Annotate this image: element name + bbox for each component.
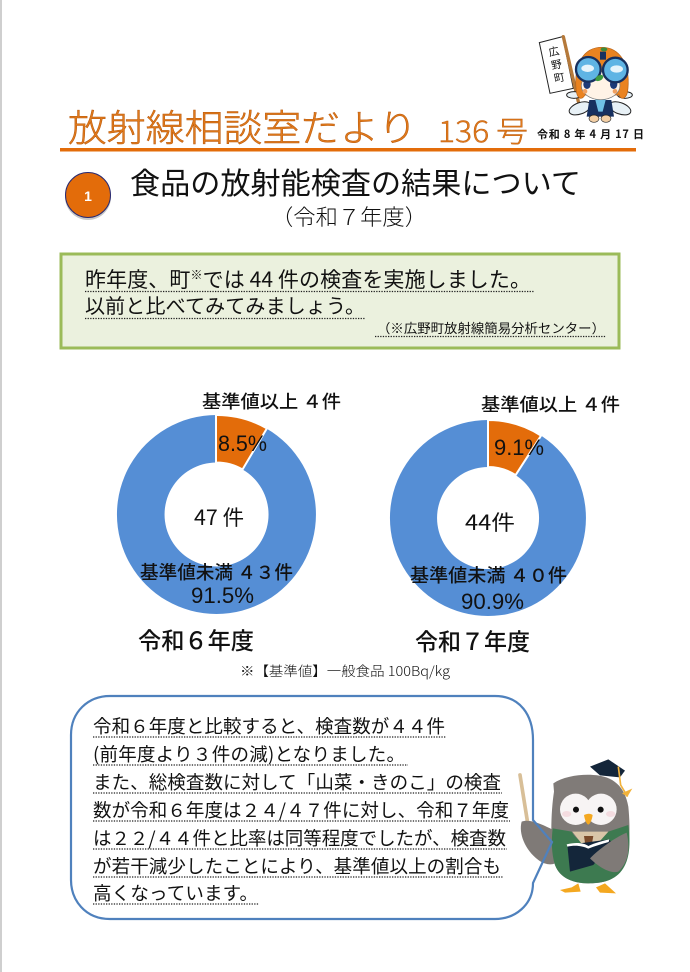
icon: section number badge: 1 — [84, 188, 92, 204]
intro text line 1: では 44 件の検査を実施しました。 — [203, 264, 531, 294]
footnote: standard value: ※【基準値】一般食品 100Bq/kg — [240, 660, 451, 680]
issue number: 136 号 — [438, 109, 528, 151]
value: 91.5%: 91.5% — [191, 583, 254, 608]
callout: explanation speech bubble — [71, 696, 552, 919]
value: 8.5%: 8.5% — [218, 431, 267, 456]
value: 90.9%: 90.9% — [461, 589, 524, 614]
source note: （※広野町放射線簡易分析センター） — [377, 318, 605, 337]
intro text line 1: 昨年度、町 — [85, 264, 190, 294]
callout text: 高くなっています。 — [93, 880, 258, 906]
callout text — [93, 713, 509, 906]
panel: introduction — [61, 254, 619, 348]
label: below standard: 基準値未満 ４０件 — [410, 562, 567, 588]
label: at or above standard: 基準値以上 ４件 — [481, 391, 620, 417]
donut chart: fiscal Reiwa 7 — [390, 391, 620, 657]
callout text: 令和６年度と比較すると、検査数が４４件 — [93, 713, 445, 739]
heading subtitle: （令和７年度） — [271, 200, 427, 232]
issue date: 令和 8 年 4 月 17 日 — [537, 126, 644, 142]
callout text: また、総検査数に対して「山菜・きのこ」の検査 — [93, 769, 501, 795]
label: below standard: 基準値未満 ４３件 — [140, 559, 293, 585]
donut chart: fiscal Reiwa 6 — [117, 388, 341, 656]
icon: town mascot holding flag — [539, 37, 633, 122]
total count: 47 件 — [194, 502, 244, 532]
heading text: 食品の放射能検査の結果について — [130, 159, 581, 203]
callout text: が若干減少したことにより、基準値以上の割合も — [93, 853, 501, 879]
icon: town mascot holding flag: 野 — [550, 56, 564, 73]
intro text line 1: ※ — [190, 266, 203, 283]
chart caption: 令和７年度 — [415, 623, 530, 657]
title: newsletter header — [60, 98, 644, 152]
icon: town mascot holding flag: 広 — [547, 43, 561, 60]
section heading: food radioactivity results — [65, 159, 581, 232]
total count: 44件 — [465, 507, 515, 537]
icon: owl teacher with pointer — [520, 759, 631, 893]
value: 9.1%: 9.1% — [494, 435, 544, 460]
callout text: は２２/４４件と比率は同等程度でしたが、検査数 — [93, 825, 506, 851]
header rule — [60, 148, 636, 152]
chart caption: 令和６年度 — [138, 622, 254, 656]
icon: section number badge — [65, 172, 111, 220]
label: at or above standard: 基準値以上 ４件 — [202, 388, 341, 414]
heading: newsletter name: 放射線相談室だより — [68, 98, 417, 152]
callout text: 数が令和６年度は２４/４７件に対し、令和７年度 — [93, 797, 509, 823]
callout text: (前年度より３件の減)となりました。 — [93, 741, 405, 767]
intro text line 2: 以前と比べてみてみましょう。 — [85, 290, 365, 319]
icon: town mascot holding flag: 町 — [553, 69, 566, 86]
